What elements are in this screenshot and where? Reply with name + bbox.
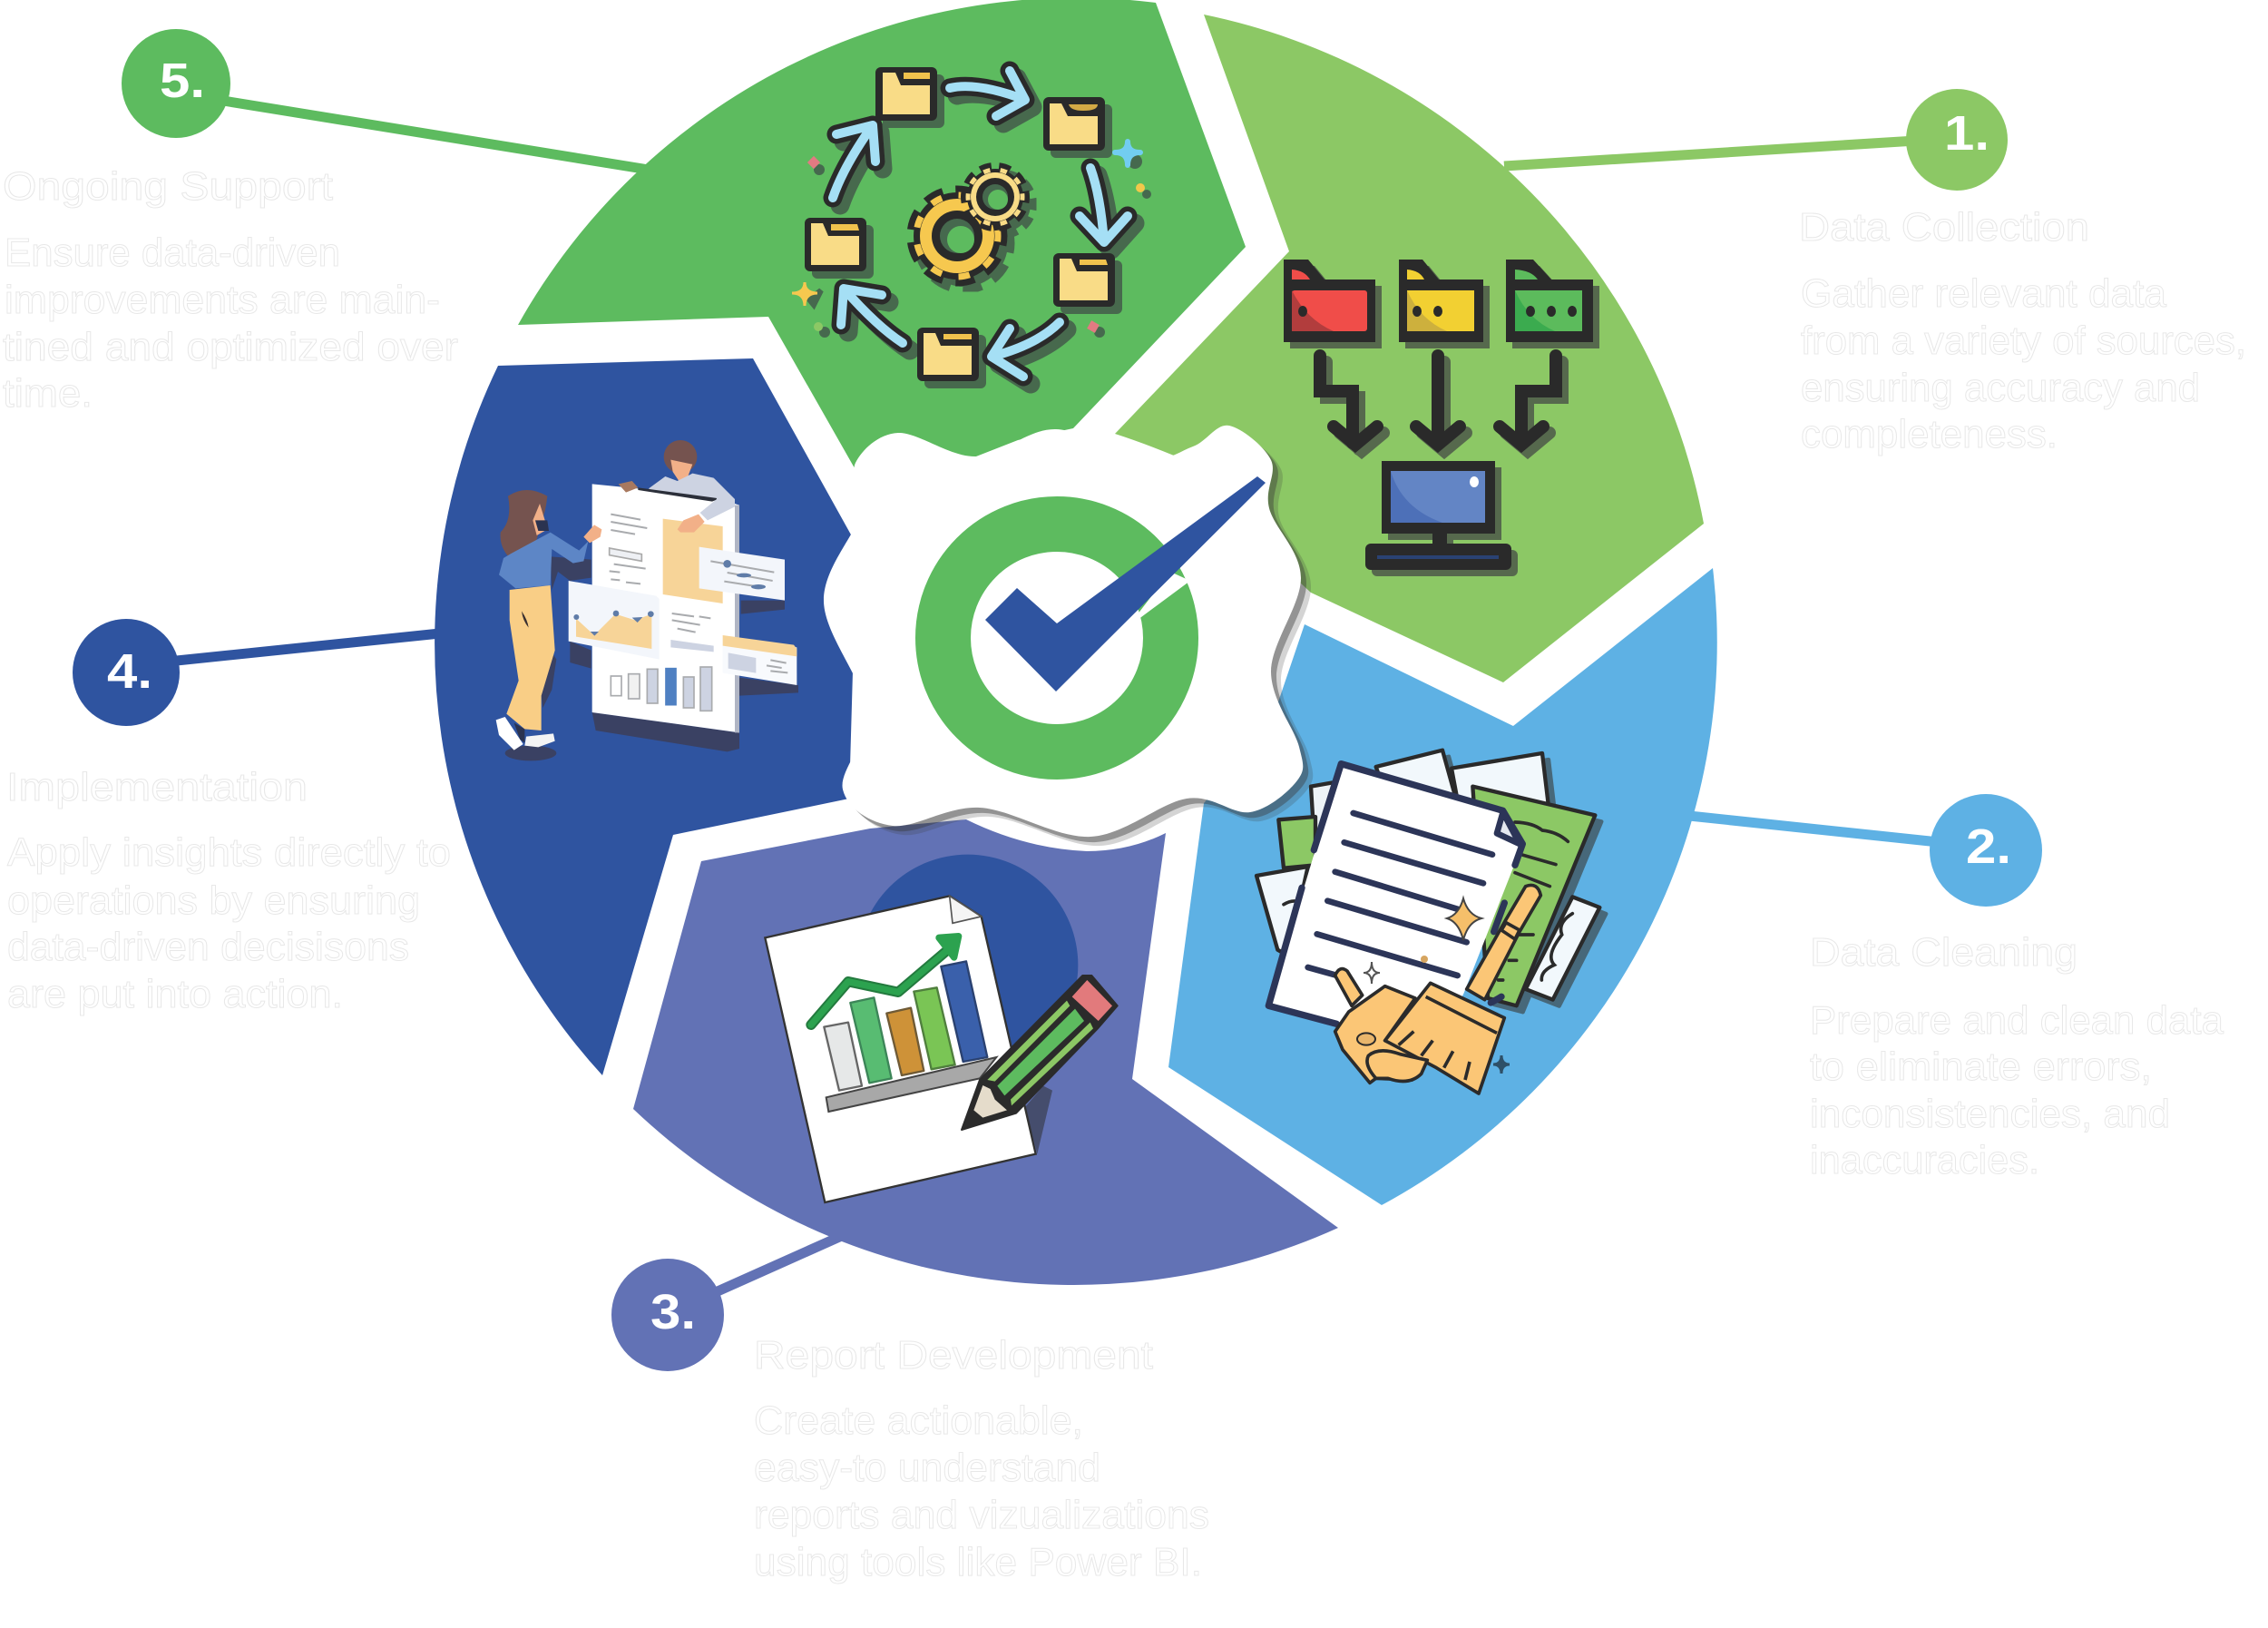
badge: number 4 bbox=[73, 619, 180, 726]
board shadows bbox=[505, 556, 798, 760]
pencil bbox=[962, 976, 1118, 1130]
bars bbox=[824, 961, 987, 1091]
chart card bbox=[569, 581, 660, 660]
bars on board bbox=[611, 667, 712, 711]
badge: number 1 bbox=[1906, 89, 2008, 191]
slice: step 2 data cleaning bbox=[1168, 568, 1717, 1205]
computer bbox=[1365, 461, 1511, 570]
icon: folders flowing to computer bbox=[1284, 260, 1593, 570]
text block: step 2 bbox=[1810, 930, 2224, 1182]
text block: step 4: Implementation bbox=[6, 765, 308, 809]
paper shadow bbox=[1025, 1086, 1052, 1154]
text block: step 1: ensuring accuracy and bbox=[1801, 366, 2200, 410]
text block: step 1: Gather relevant data bbox=[1801, 271, 2167, 316]
yellow folder bbox=[1399, 260, 1483, 342]
badge: number 5: 5. bbox=[160, 54, 205, 108]
slice: step 1 data collection bbox=[1115, 15, 1704, 682]
text block: step 4: Apply insights directly to bbox=[7, 830, 451, 875]
flow arrows bbox=[1320, 356, 1556, 445]
paper bbox=[765, 896, 1036, 1202]
badge: number 1: 1. bbox=[1944, 106, 1989, 161]
slider card bbox=[699, 547, 785, 601]
text block: step 2: inconsistencies, and bbox=[1810, 1092, 2170, 1136]
badge: number 4: 4. bbox=[107, 644, 152, 699]
sparkles bbox=[792, 142, 1151, 338]
connector: step 1 bbox=[1504, 141, 1916, 166]
text block: step 4: operations by ensuring bbox=[7, 878, 420, 923]
text block: step 3: Report Development bbox=[754, 1333, 1153, 1378]
text block: step 4: data-driven decisisons bbox=[7, 925, 409, 969]
main document bbox=[1268, 764, 1522, 1025]
badge: number 2 bbox=[1930, 794, 2042, 907]
text block: step 1 bbox=[1799, 205, 2246, 456]
report board bbox=[592, 484, 739, 732]
man behind board bbox=[649, 440, 719, 499]
centre badge shadow bbox=[829, 431, 1313, 846]
text block: step 4 bbox=[6, 765, 451, 1016]
slice: step 3 report development bbox=[633, 819, 1338, 1285]
slice: step 5 ongoing support bbox=[518, 0, 1246, 481]
man's arm and hands on board bbox=[619, 478, 735, 533]
sparkles on document bbox=[1364, 898, 1510, 1074]
slice: step 4 implementation bbox=[435, 358, 856, 1075]
connector: step 3 bbox=[709, 1234, 846, 1295]
background papers bbox=[1256, 750, 1599, 1005]
gears bbox=[913, 167, 1025, 280]
badge: number 3 bbox=[611, 1259, 724, 1371]
connector: step 4 bbox=[168, 633, 440, 662]
text block: step 4: are put into action. bbox=[7, 972, 343, 1016]
small card bbox=[723, 635, 797, 685]
cycle arrows outline bbox=[833, 71, 1128, 377]
text block: step 5: Ensure data-driven bbox=[5, 230, 340, 275]
cycle arrows fill bbox=[833, 71, 1128, 377]
badge: number 2: 2. bbox=[1966, 819, 2011, 874]
text block: step 5: time. bbox=[3, 371, 93, 416]
icon: people reviewing report board bbox=[496, 440, 798, 760]
text block: step 5: improvements are main- bbox=[5, 278, 440, 322]
text block: step 5 bbox=[3, 164, 458, 416]
text block: step 3: reports and vizualizations bbox=[754, 1493, 1209, 1537]
squiggles on background papers bbox=[1284, 822, 1572, 980]
text block: step 5: Ongoing Support bbox=[3, 164, 333, 209]
text block: step 5: tined and optimized over bbox=[3, 325, 458, 369]
chart shelf bbox=[826, 1057, 996, 1112]
icon: documents and broom bbox=[1256, 750, 1599, 1094]
text block: step 1: from a variety of sources, bbox=[1801, 319, 2246, 363]
icon: folder cycle and gears bbox=[792, 67, 1151, 381]
text block: step 1: completeness. bbox=[1801, 412, 2058, 456]
folders bbox=[805, 67, 1115, 381]
woman bbox=[496, 490, 601, 750]
icon: green ring with check mark bbox=[943, 476, 1266, 751]
text block: step 2: inaccuracies. bbox=[1810, 1138, 2039, 1182]
connector: step 2 bbox=[1689, 816, 1939, 842]
text block: step 3: using tools like Power BI. bbox=[754, 1540, 1202, 1584]
icon: report with chart and pencil bbox=[765, 855, 1118, 1202]
green folder bbox=[1506, 260, 1593, 342]
text block: step 2: Data Cleaning bbox=[1810, 930, 2077, 975]
text block: step 1: Data Collection bbox=[1799, 205, 2089, 250]
backdrop circle bbox=[857, 855, 1078, 1075]
centre badge bbox=[824, 426, 1303, 837]
connector: step 5 bbox=[218, 100, 649, 170]
text block: step 3 bbox=[754, 1333, 1209, 1584]
text block: step 3: easy-to understand bbox=[754, 1446, 1100, 1490]
text block: step 3: Create actionable, bbox=[754, 1398, 1083, 1443]
badge: number 3: 3. bbox=[650, 1285, 696, 1339]
red folder bbox=[1284, 260, 1375, 342]
broom and hand bbox=[1335, 885, 1540, 1094]
text block: step 2: Prepare and clean data bbox=[1810, 998, 2224, 1043]
badge: number 5 bbox=[122, 29, 230, 138]
text block: step 2: to eliminate errors, bbox=[1810, 1044, 2152, 1089]
trend arrow bbox=[811, 937, 959, 1025]
